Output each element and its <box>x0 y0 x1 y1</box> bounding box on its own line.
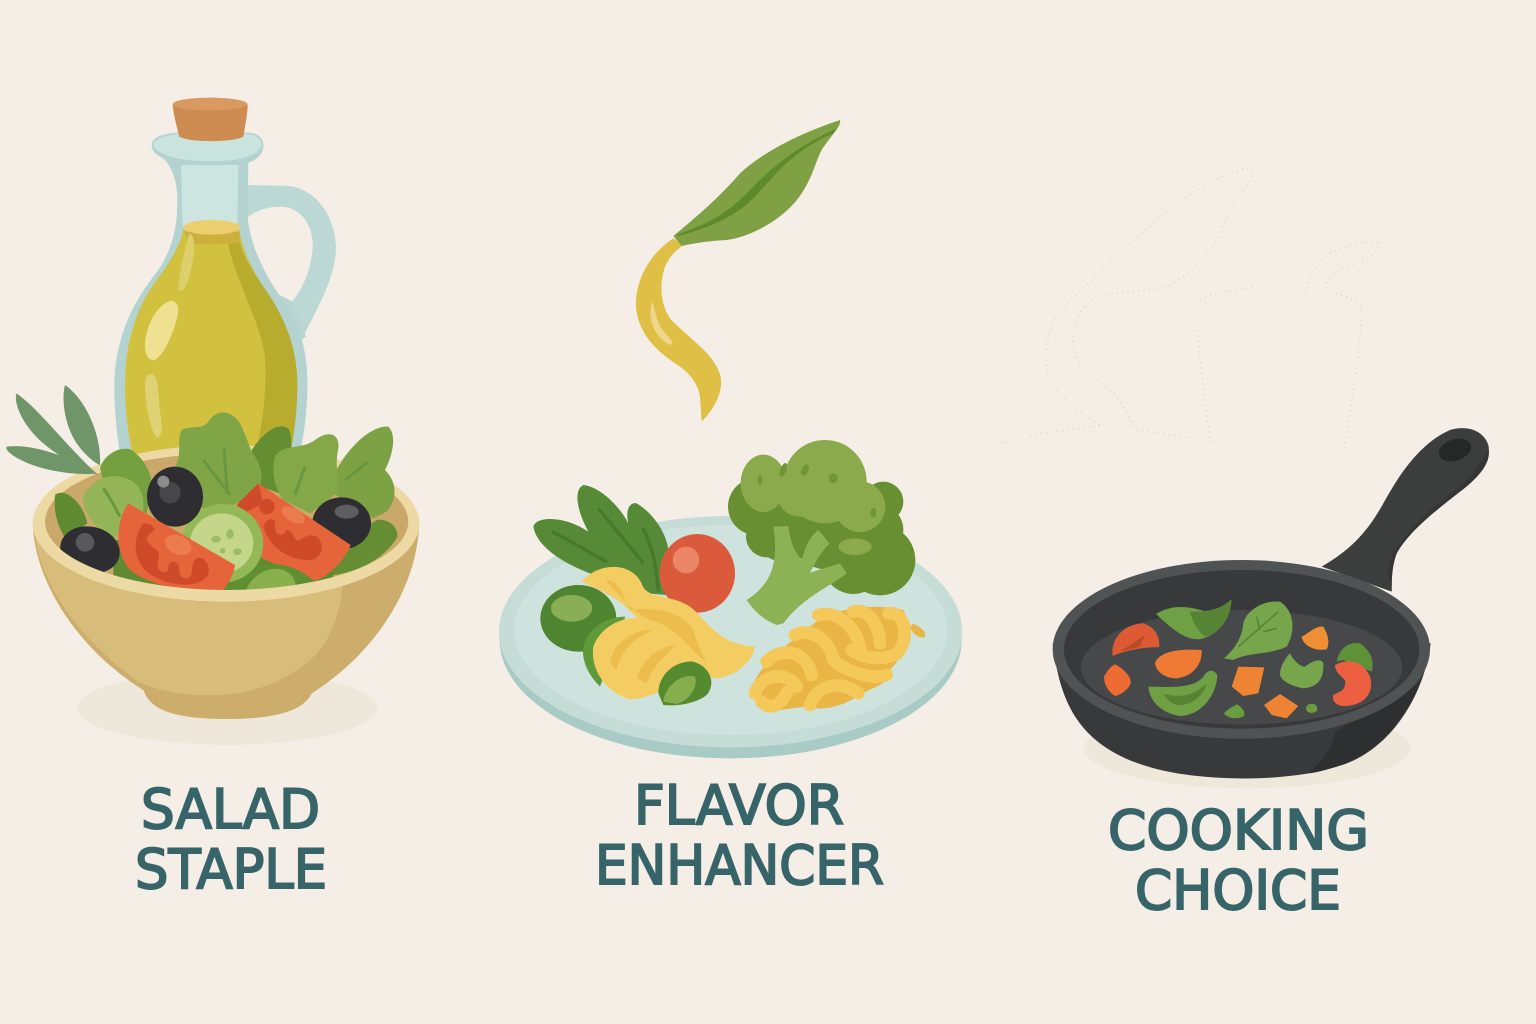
heading: salad staple <box>135 778 327 901</box>
cooked vegetables <box>1104 599 1373 718</box>
heading: flavor enhancer: FLAVOR <box>634 774 844 837</box>
bowl front rim <box>33 522 419 602</box>
pan interior <box>1064 570 1419 729</box>
olive centre <box>147 467 203 527</box>
plate <box>499 516 962 758</box>
bowl body <box>33 523 419 719</box>
cherry tomato <box>660 534 735 613</box>
icon: olive oil bottle <box>114 98 336 455</box>
heading: salad staple: STAPLE <box>135 838 327 901</box>
brussels sprout left <box>540 585 625 687</box>
salad leaves <box>55 412 397 593</box>
heading: cooking choice: CHOICE <box>1135 859 1341 922</box>
icon: cork <box>173 98 248 141</box>
pasta twist left <box>582 567 755 699</box>
pan handle <box>1322 428 1489 592</box>
heading: cooking choice <box>1108 799 1369 922</box>
spinach leaves <box>533 485 668 595</box>
bottom leaf bits <box>220 563 315 593</box>
panel: cooking choice <box>1000 168 1489 922</box>
bowl rim and interior <box>33 445 419 602</box>
broccoli <box>728 440 915 595</box>
icon: oil ribbon turning into leaf <box>636 120 840 422</box>
icon: salad bowl <box>6 385 419 719</box>
heading: flavor enhancer: ENHANCER <box>595 834 884 897</box>
shadow under bowl <box>77 671 377 745</box>
heading: flavor enhancer <box>595 774 884 897</box>
icon: plate of vegetables and pasta <box>499 440 962 758</box>
pasta fusilli right <box>753 607 925 710</box>
broccoli stem <box>747 526 847 625</box>
panel: salad staple <box>6 98 419 901</box>
tomato wedge left <box>118 503 235 593</box>
bowl light side <box>35 537 343 695</box>
olive right <box>312 497 371 549</box>
shadow under pan <box>1084 708 1411 788</box>
panel: flavor enhancer <box>499 120 962 897</box>
pan body <box>1053 643 1431 778</box>
cucumber slice <box>182 504 263 583</box>
pan rim <box>1053 560 1430 739</box>
heading: salad staple: SALAD <box>141 778 320 841</box>
olive left <box>56 521 124 579</box>
frying pan with vegetables <box>1053 428 1489 788</box>
olive sprig <box>6 385 100 475</box>
pan floor <box>1081 610 1402 725</box>
brussels sprout front <box>658 662 711 705</box>
heading: cooking choice: COOKING <box>1108 799 1369 862</box>
steam lines <box>1000 168 1379 457</box>
tomato wedge right <box>237 483 351 581</box>
pan body shaded side <box>1308 683 1420 773</box>
